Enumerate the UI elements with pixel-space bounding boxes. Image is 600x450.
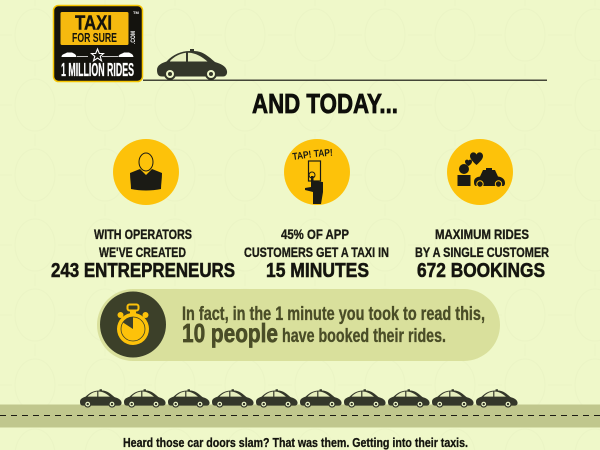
- logo: TaxiForSure 1 million rides: [54, 6, 142, 82]
- icon: tap tap phone: TAP!: [313, 148, 333, 160]
- stat: 15 minutes: [244, 226, 389, 282]
- logo: TaxiForSure 1 million rides: TM: [133, 10, 139, 15]
- stat: 672 bookings: 672 BOOKINGS: [417, 259, 545, 282]
- callout text: In fact, in the 1 minute you took to read this,: [182, 304, 485, 325]
- logo: TaxiForSure 1 million rides: TAXI: [75, 12, 112, 34]
- road: [0, 404, 600, 428]
- callout text: [182, 304, 485, 348]
- stat: 672 bookings: MAXIMUM RIDES: [435, 226, 529, 242]
- stat: entrepreneurs: 243 ENTREPRENEURS: [51, 259, 235, 282]
- icon: entrepreneur: [113, 139, 179, 205]
- header line: [143, 80, 547, 81]
- icon: tap tap phone: TAP!: [292, 149, 312, 163]
- stat: 672 bookings: BY A SINGLE CUSTOMER: [415, 244, 549, 260]
- stat: entrepreneurs: WITH OPERATORS: [94, 226, 192, 242]
- icon: customer loves taxi: [447, 139, 513, 205]
- callout text: 10 people: [182, 318, 278, 348]
- title: AND TODAY...: [252, 88, 398, 119]
- logo: TaxiForSure 1 million rides: FOR SURE: [72, 31, 117, 45]
- footer caption: Heard those car doors slam? That was them. Getting into their taxis.: [123, 435, 468, 450]
- stat: 15 minutes: 15 MINUTES: [266, 259, 369, 282]
- logo: TaxiForSure 1 million rides: 1 MILLION RIDES: [61, 60, 134, 80]
- stat: 15 minutes: 45% OF APP: [281, 226, 349, 242]
- callout text: have booked their rides.: [282, 326, 446, 347]
- icon: tap tap phone: [284, 139, 350, 205]
- stat: 672 bookings: [415, 226, 549, 282]
- callout: 10 people per minute: [97, 289, 500, 361]
- stat: entrepreneurs: WE'VE CREATED: [99, 244, 186, 260]
- stat: entrepreneurs: [51, 226, 235, 282]
- stat: 15 minutes: CUSTOMERS GET A TAXI IN: [244, 244, 389, 260]
- row of taxis: [80, 389, 518, 408]
- logo: TaxiForSure 1 million rides: .COM: [131, 31, 137, 44]
- header car: [157, 49, 227, 80]
- icon: stopwatch: [100, 292, 166, 358]
